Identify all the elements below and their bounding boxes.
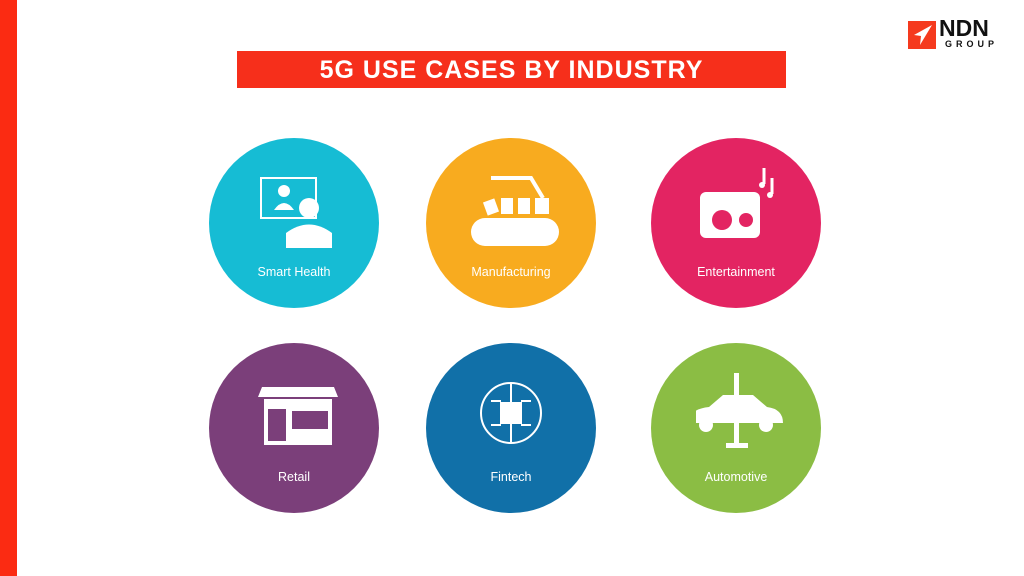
title banner: 5G USE CASES BY INDUSTRY xyxy=(320,56,703,84)
icon: conveyor xyxy=(471,176,559,246)
panel: fintech: Fintech xyxy=(490,470,532,484)
title banner xyxy=(237,51,786,88)
icon: telehealth xyxy=(260,177,332,248)
panel: retail xyxy=(209,343,379,513)
icon: shop xyxy=(258,387,338,445)
logo text: GROUP xyxy=(945,39,998,49)
panel: entertainment xyxy=(651,138,821,308)
left red bar xyxy=(0,0,17,576)
panel: entertainment: Entertainment xyxy=(697,265,775,279)
logo xyxy=(908,15,998,49)
logo text: NDN xyxy=(939,15,989,41)
icon: radio xyxy=(700,168,774,238)
panel: automotive: Automotive xyxy=(705,470,767,484)
panel: manufacturing: Manufacturing xyxy=(471,265,551,279)
panel: automotive xyxy=(651,343,821,513)
panel: manufacturing xyxy=(426,138,596,308)
panel: smart health: Smart Health xyxy=(258,265,330,279)
panel: fintech xyxy=(426,343,596,513)
icon: logo mark xyxy=(908,21,936,49)
icon: chip xyxy=(480,382,542,444)
panel: smart health xyxy=(209,138,379,308)
logo text xyxy=(939,15,998,49)
icon: car on lift xyxy=(696,373,783,448)
panel: retail: Retail xyxy=(278,470,310,484)
